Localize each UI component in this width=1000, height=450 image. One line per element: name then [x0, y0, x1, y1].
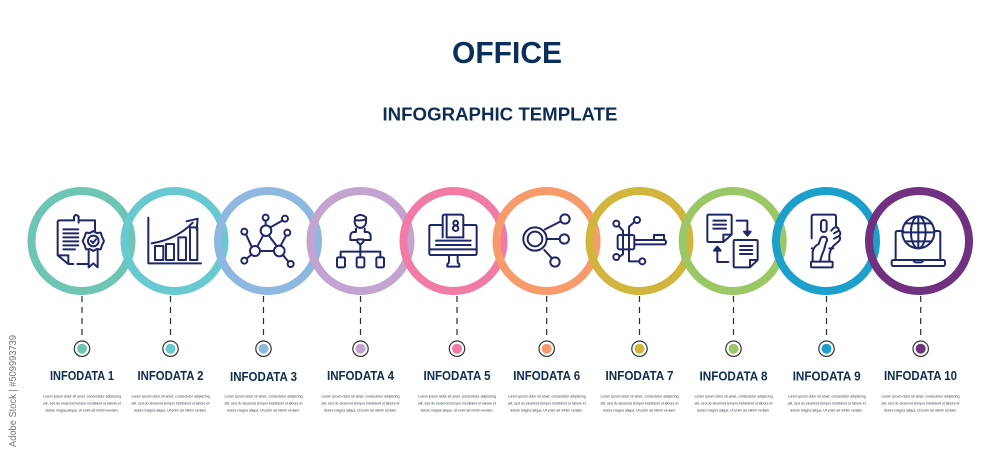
block 10 text: [882, 369, 960, 412]
marker 3: [256, 341, 271, 356]
marker dots: [74, 341, 928, 356]
block 5 text: elit, sed do eiusmod tempor incididunt ut labore et: [418, 402, 496, 406]
icon: circuit key: [613, 217, 666, 264]
block 8 text: elit, sed do eiusmod tempor incididunt ut labore et: [694, 402, 772, 406]
block 2 text: Lorem ipsum dolor sit amet, consectetur adipiscing: [132, 394, 210, 398]
block 7 text: Lorem ipsum dolor sit amet, consectetur adipiscing: [600, 394, 678, 398]
block 3 text: dolore magna aliqua. Ut enim ad minim veniam.: [227, 408, 300, 412]
block 2 text: INFODATA 2: [138, 369, 204, 383]
marker 5: [449, 341, 465, 356]
block 6 text: INFODATA 6: [513, 369, 580, 383]
block 2 text: [132, 369, 210, 412]
icon: growth bar chart: [148, 218, 201, 263]
ring 7: [590, 191, 690, 291]
block 7 text: [600, 369, 678, 412]
marker 6: [539, 341, 554, 356]
block 4 text: elit, sed do eiusmod tempor incididunt ut labore et: [322, 402, 400, 406]
block 7 text: dolore magna aliqua. Ut enim ad minim veniam.: [603, 408, 676, 412]
ring 8: [683, 191, 783, 291]
title: OFFICE: [452, 36, 562, 70]
block 9 text: elit, sed do eiusmod tempor incididunt ut labore et: [788, 402, 866, 406]
block 6 text: Lorem ipsum dolor sit amet, consectetur adipiscing: [508, 394, 586, 398]
icon: computer with document: [429, 215, 477, 267]
block 5 text: Lorem ipsum dolor sit amet, consectetur adipiscing: [418, 394, 496, 398]
block 10 text: INFODATA 10: [884, 369, 957, 383]
ring 1: [32, 191, 132, 291]
block 5 text: dolore magna aliqua. Ut enim ad minim veniam.: [420, 408, 494, 412]
block 2 text: dolore magna aliqua. Ut enim ad minim veniam.: [134, 408, 207, 412]
subtitle: INFOGRAPHIC TEMPLATE: [382, 104, 618, 124]
side credit: Adobe Stock | #509993739: [8, 335, 19, 447]
block 5 text: [418, 369, 496, 412]
block 9 text: Lorem ipsum dolor sit amet, consectetur adipiscing: [788, 394, 866, 398]
marker 10: [913, 341, 928, 356]
marker 8: [726, 341, 741, 356]
icon: hand holding phone: [811, 215, 840, 267]
marker 1: [74, 341, 90, 356]
marker 4: [353, 341, 368, 356]
block 1 text: [43, 369, 121, 412]
block 6 text: [508, 369, 586, 412]
marker 7: [632, 341, 647, 356]
block 4 text: INFODATA 4: [327, 369, 394, 383]
block 3 text: elit, sed do eiusmod tempor incididunt ut labore et: [224, 402, 302, 406]
icon: certificate document: [58, 215, 104, 267]
block 1 text: INFODATA 1: [50, 369, 114, 383]
icon: laptop with globe: [892, 216, 945, 266]
block 5 text: INFODATA 5: [424, 369, 491, 383]
block 10 text: Lorem ipsum dolor sit amet, consectetur adipiscing: [882, 394, 960, 398]
block 8 text: INFODATA 8: [700, 370, 768, 384]
block 9 text: [788, 370, 866, 412]
ring 5: [404, 191, 504, 291]
marker 9: [819, 341, 834, 356]
rings row: [32, 191, 969, 291]
block 8 text: Lorem ipsum dolor sit amet, consectetur adipiscing: [694, 394, 772, 398]
block 9 text: INFODATA 9: [793, 370, 861, 384]
dashed connectors: [82, 296, 921, 340]
icon: organisation hierarchy: [337, 215, 384, 267]
block 3 text: Lorem ipsum dolor sit amet, consectetur adipiscing: [224, 394, 302, 398]
block 4 text: Lorem ipsum dolor sit amet, consectetur adipiscing: [322, 394, 400, 398]
block 7 text: elit, sed do eiusmod tempor incididunt ut labore et: [600, 402, 678, 406]
block 9 text: dolore magna aliqua. Ut enim ad minim veniam.: [790, 408, 863, 412]
block 1 text: Lorem ipsum dolor sit amet, consectetur adipiscing: [43, 394, 121, 398]
block 8 text: dolore magna aliqua. Ut enim ad minim veniam.: [697, 408, 770, 412]
ring 2: [124, 191, 224, 291]
block 4 text: dolore magna aliqua. Ut enim ad minim veniam.: [324, 408, 397, 412]
block 2 text: elit, sed do eiusmod tempor incididunt ut labore et: [132, 402, 210, 406]
block 10 text: elit, sed do eiusmod tempor incididunt ut labore et: [882, 402, 960, 406]
marker 2: [163, 341, 178, 356]
block 3 text: [224, 370, 302, 412]
block 6 text: dolore magna aliqua. Ut enim ad minim veniam.: [510, 408, 583, 412]
icon: document exchange: [707, 215, 758, 267]
ring 4: [310, 191, 410, 291]
block 1 text: dolore magna aliqua. Ut enim ad minim veniam.: [46, 408, 118, 412]
block 10 text: dolore magna aliqua. Ut enim ad minim veniam.: [884, 408, 957, 412]
ring 10: [869, 191, 969, 291]
icon: share nodes: [523, 214, 570, 267]
ring 3: [218, 191, 318, 291]
block 6 text: elit, sed do eiusmod tempor incididunt ut labore et: [508, 402, 586, 406]
icon: network triangle: [241, 215, 294, 267]
ring 6: [496, 191, 596, 291]
block 8 text: [694, 370, 772, 412]
block 4 text: [322, 369, 400, 412]
block 1 text: elit, sed do eiusmod tempor incididunt ut labore et: [43, 402, 121, 406]
block 7 text: INFODATA 7: [606, 369, 674, 383]
ring 9: [776, 191, 876, 291]
block 3 text: INFODATA 3: [230, 370, 297, 384]
